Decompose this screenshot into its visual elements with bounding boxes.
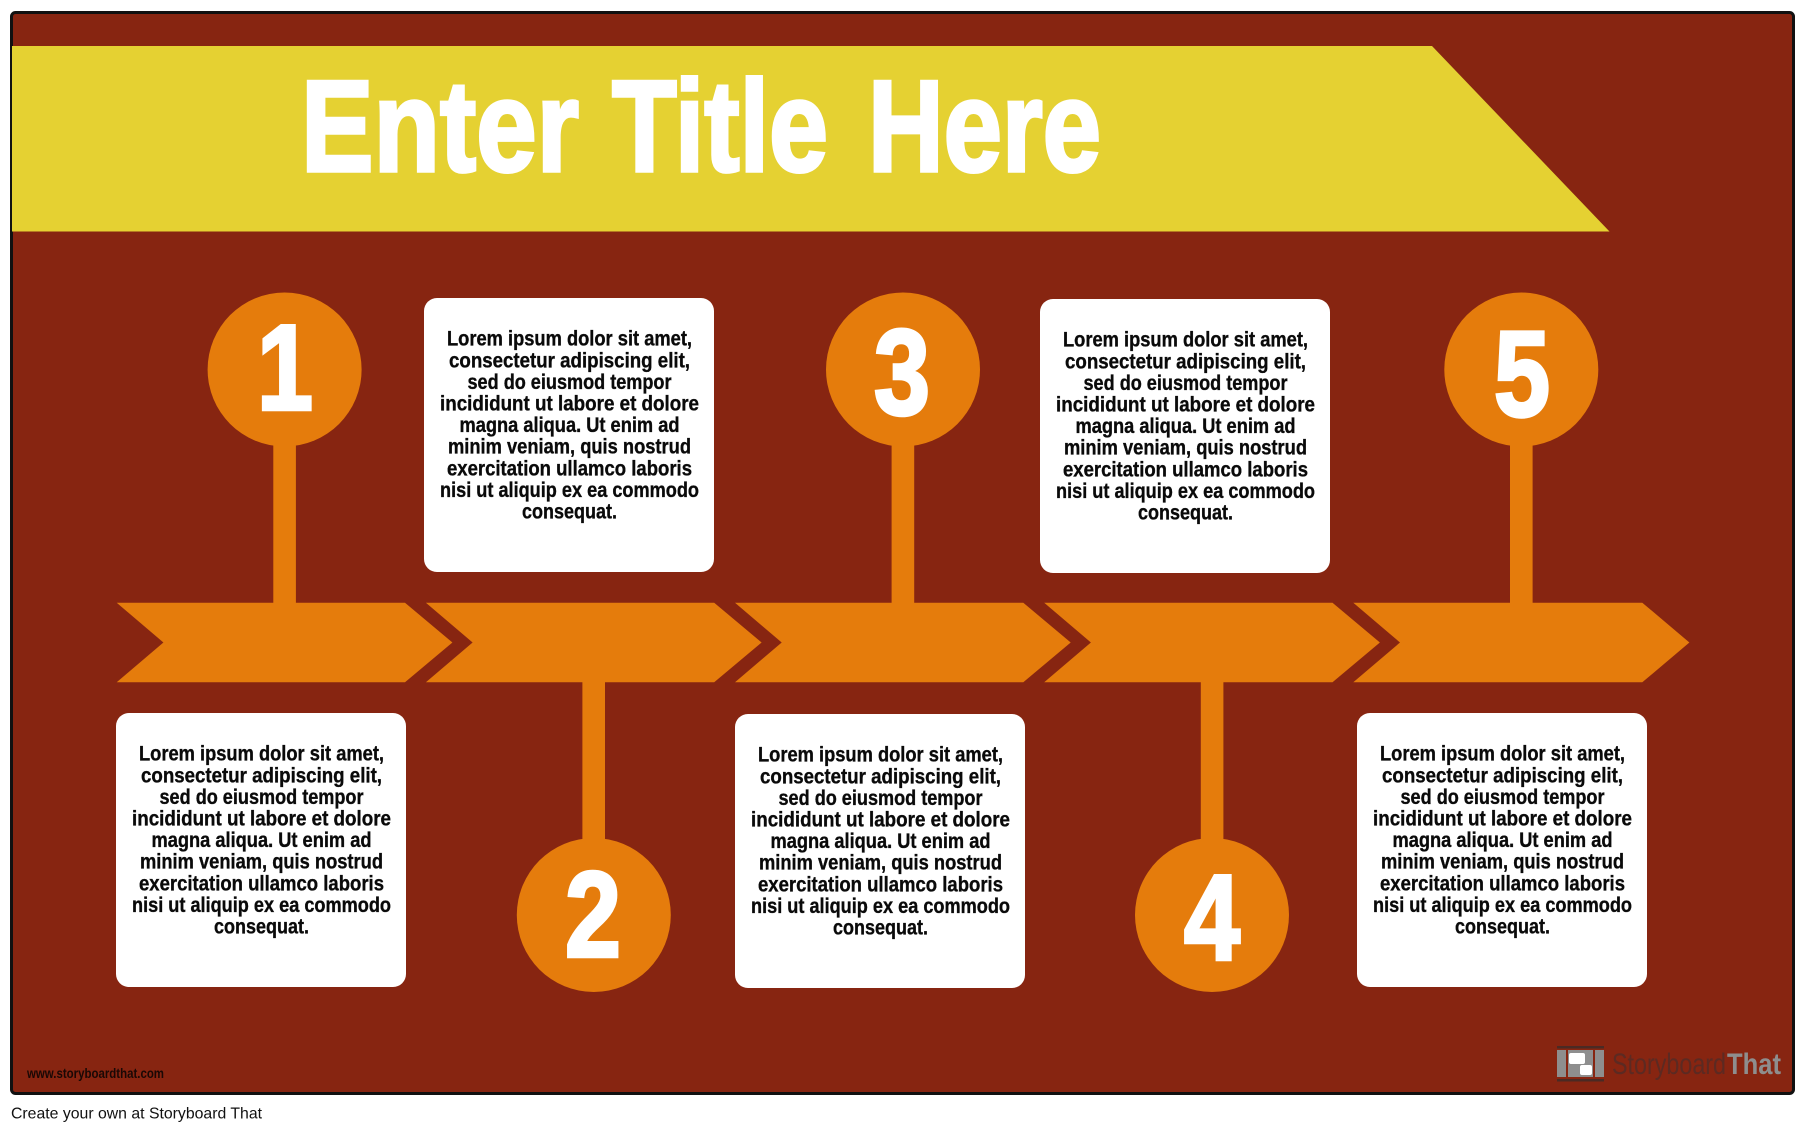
text card 2 [424, 298, 714, 572]
text card 1: magna aliqua. Ut enim ad [152, 828, 372, 852]
icon: film frame with speech bubbles [1557, 1046, 1604, 1082]
step 5 number circle: 5 [1494, 306, 1550, 442]
text card 5: Lorem ipsum dolor sit amet, [1380, 742, 1625, 766]
title banner [12, 46, 1610, 232]
text card 1: incididunt ut labore et dolore [132, 806, 391, 830]
title: Here [868, 53, 1101, 199]
step 3 number circle [826, 292, 980, 446]
step 5 number circle [1444, 292, 1598, 446]
text card 1: nisi ut aliquip ex ea commodo [132, 893, 391, 917]
text card 4: minim veniam, quis nostrud [1064, 436, 1307, 460]
text card 2: Lorem ipsum dolor sit amet, [447, 327, 692, 351]
text card 2: incididunt ut labore et dolore [440, 392, 699, 416]
text card 3: minim veniam, quis nostrud [759, 851, 1002, 875]
text card 1 [116, 713, 406, 987]
text card 3: Lorem ipsum dolor sit amet, [758, 743, 1003, 767]
title: Enter [301, 53, 579, 199]
website url: www.storyboardthat.com [26, 1065, 164, 1081]
text card 2: magna aliqua. Ut enim ad [460, 413, 680, 437]
text card 3: incididunt ut labore et dolore [751, 808, 1010, 832]
text card 2: exercitation ullamco laboris [447, 456, 692, 480]
text card 5: consectetur adipiscing elit, [1382, 763, 1623, 787]
text card 3: magna aliqua. Ut enim ad [770, 829, 990, 853]
text card 1: exercitation ullamco laboris [139, 871, 384, 895]
timeline stem 1 [273, 400, 296, 605]
text card 5: magna aliqua. Ut enim ad [1392, 828, 1612, 852]
text card 2: sed do eiusmod tempor [468, 370, 672, 394]
text card 4: consequat. [1138, 500, 1233, 524]
text card 5: exercitation ullamco laboris [1380, 871, 1625, 895]
timeline stem 3 [892, 400, 914, 605]
step 1 number circle [208, 292, 362, 446]
timeline stem 5 [1510, 400, 1533, 605]
text card 1: minim veniam, quis nostrud [140, 850, 383, 874]
text card 4: exercitation ullamco laboris [1063, 457, 1308, 481]
title: Title [612, 53, 828, 199]
text card 2: minim veniam, quis nostrud [448, 435, 691, 459]
chevron arrow 4 [1044, 603, 1380, 682]
text card 4: sed do eiusmod tempor [1084, 371, 1288, 395]
text card 5: minim veniam, quis nostrud [1381, 850, 1624, 874]
footer credit: Create your own at Storyboard That [11, 1106, 263, 1122]
text card 1: Lorem ipsum dolor sit amet, [139, 742, 384, 766]
storyboard that logo: Storyboard [1612, 1048, 1726, 1081]
text card 4: consectetur adipiscing elit, [1065, 349, 1306, 373]
storyboard that logo: That [1727, 1048, 1781, 1081]
timeline stem 4 [1201, 680, 1223, 880]
text card 3 [735, 714, 1025, 988]
chevron arrow 2 [426, 603, 762, 682]
storyboard that logo [1557, 1046, 1781, 1082]
chevron arrow 5 [1353, 603, 1689, 682]
text card 4: incididunt ut labore et dolore [1056, 392, 1315, 416]
text card 1: sed do eiusmod tempor [160, 785, 364, 809]
chevron arrow 1 [117, 603, 452, 682]
title [301, 53, 1101, 199]
text card 3: exercitation ullamco laboris [758, 872, 1003, 896]
step 2 number circle [517, 838, 671, 992]
step 4 number circle: 4 [1184, 850, 1240, 986]
step 2 number circle: 2 [565, 846, 621, 982]
text card 1: consectetur adipiscing elit, [141, 763, 382, 787]
timeline stem 2 [582, 680, 605, 880]
step 1 number circle: 1 [257, 300, 313, 436]
text card 4: Lorem ipsum dolor sit amet, [1063, 328, 1308, 352]
text card 2: consequat. [522, 500, 617, 524]
text card 3: consequat. [833, 916, 928, 940]
text card 4: nisi ut aliquip ex ea commodo [1056, 479, 1315, 503]
text card 2: nisi ut aliquip ex ea commodo [440, 478, 699, 502]
text card 5 [1357, 713, 1647, 987]
text card 4: magna aliqua. Ut enim ad [1076, 414, 1296, 438]
text card 3: nisi ut aliquip ex ea commodo [751, 894, 1010, 918]
text card 3: consectetur adipiscing elit, [760, 764, 1001, 788]
text card 5: nisi ut aliquip ex ea commodo [1373, 893, 1632, 917]
text card 1: consequat. [214, 914, 309, 938]
step 3 number circle: 3 [874, 304, 930, 440]
step 4 number circle [1135, 838, 1289, 992]
text card 2: consectetur adipiscing elit, [449, 348, 690, 372]
text card 5: sed do eiusmod tempor [1400, 785, 1605, 809]
text card 5: consequat. [1455, 914, 1550, 938]
text card 5: incididunt ut labore et dolore [1373, 806, 1632, 830]
chevron arrow 3 [735, 603, 1071, 682]
text card 3: sed do eiusmod tempor [778, 786, 983, 810]
text card 4 [1040, 299, 1330, 573]
